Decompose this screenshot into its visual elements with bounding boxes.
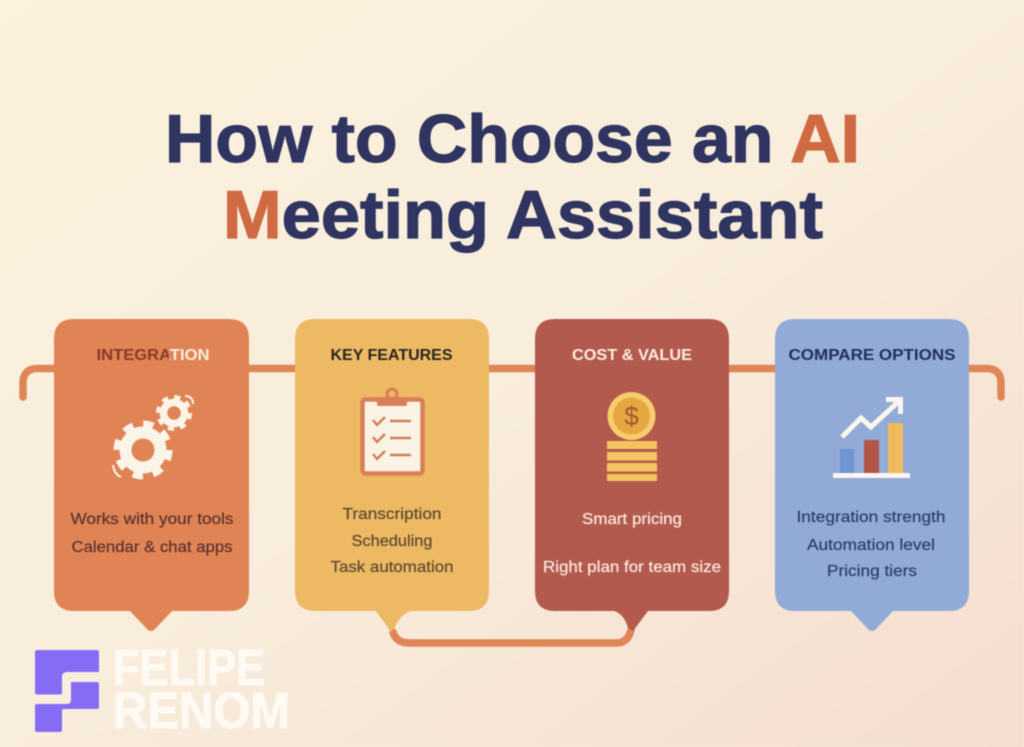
title: Meeting Assistant — [223, 177, 823, 253]
icon: gears — [113, 396, 193, 477]
card: cost and value background — [535, 319, 729, 631]
connector rail: bottom — [393, 630, 631, 643]
text: integration details: Works with your tools — [70, 511, 234, 528]
icon: logo mark — [35, 650, 99, 732]
text: key features details: Task automation — [330, 559, 454, 576]
text: integration details — [70, 511, 234, 556]
text: cost and value details: Smart pricing — [582, 511, 682, 528]
panel: cost and value — [535, 319, 729, 631]
text: integration details: Calendar & chat apps — [72, 539, 233, 556]
connector rail: top — [23, 368, 1001, 397]
text: compare options details — [796, 509, 946, 580]
text: cost and value details — [543, 511, 721, 576]
text: key features details: Transcription — [342, 506, 442, 523]
card: key features background — [295, 319, 489, 632]
card: compare options background — [775, 319, 969, 631]
logo: Felipe Renom — [35, 639, 290, 739]
text: key features details: Scheduling — [352, 533, 432, 550]
card: integration background — [54, 319, 249, 631]
text: cost and value details: Right plan for team size — [543, 559, 721, 576]
wordmark: RENOM — [113, 682, 290, 739]
icon: clipboard — [362, 389, 422, 474]
icon: coin stack — [607, 392, 657, 481]
panel: compare options — [775, 319, 969, 631]
title: How to Choose an AI — [165, 101, 860, 177]
text: compare options details: Pricing tiers — [827, 563, 917, 580]
title — [165, 101, 860, 253]
panel: integration — [54, 319, 249, 631]
text: compare options details: Integration strength — [796, 509, 946, 526]
icon: bar chart with arrow — [833, 400, 910, 478]
heading: integration: INTEGRATION — [96, 347, 210, 364]
panel: key features — [295, 319, 489, 632]
heading: compare options: COMPARE OPTIONS — [788, 347, 956, 364]
text: key features details — [330, 506, 454, 576]
heading: cost and value: COST & VALUE — [572, 347, 692, 364]
wordmark: FELIPE — [113, 639, 265, 696]
wordmark — [113, 639, 290, 739]
icon: coin stack: $ — [624, 401, 639, 431]
text: compare options details: Automation level — [807, 537, 935, 554]
heading: key features: KEY FEATURES — [330, 347, 452, 364]
